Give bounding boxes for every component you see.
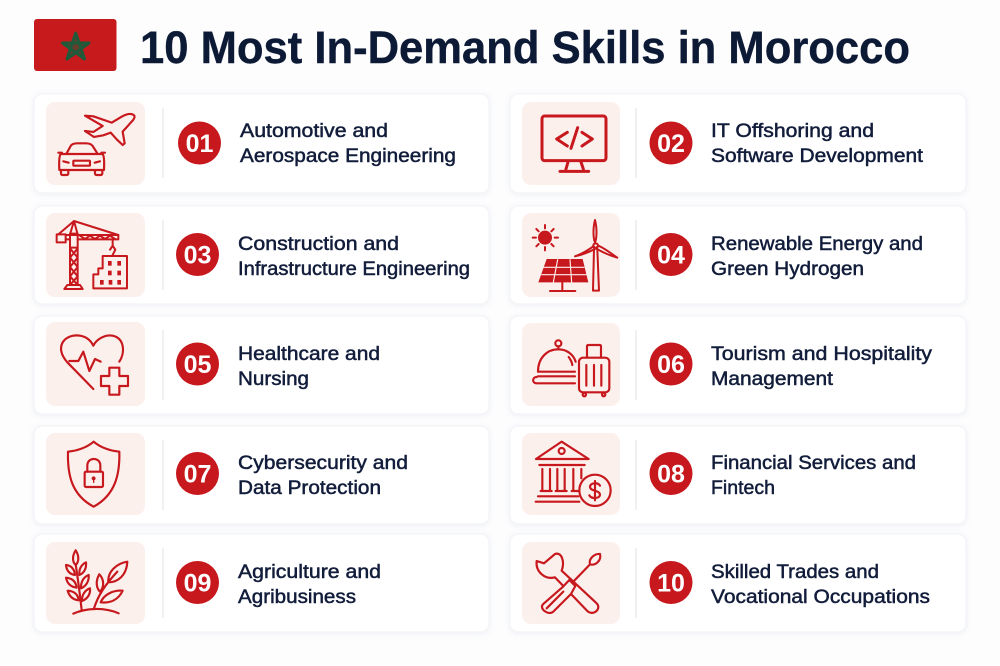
icon: sun, solar panel and wind turbine	[533, 220, 617, 291]
label: Data Protection	[238, 477, 381, 499]
label	[238, 452, 408, 499]
label: Nursing	[238, 368, 309, 390]
icon: shield with padlock	[68, 442, 119, 507]
number badge: 02	[657, 130, 685, 158]
label	[711, 233, 923, 280]
number badge: 06	[657, 351, 685, 379]
panel: 02 IT Offshoring and Software Development	[510, 94, 966, 193]
icon: wrench and screwdriver	[537, 554, 600, 613]
label: Tourism and Hospitality	[711, 343, 932, 365]
label	[238, 343, 380, 390]
number badge: 07	[184, 460, 211, 488]
panel: 09 Agriculture and Agribusiness	[34, 534, 489, 632]
title: 10 Most In-Demand Skills in Morocco	[140, 22, 910, 73]
number badge: 08	[657, 460, 685, 488]
label: Management	[711, 368, 834, 390]
icon: plane and car	[58, 114, 135, 175]
number badge	[650, 342, 692, 386]
label: Renewable Energy and	[711, 233, 923, 255]
label	[711, 343, 932, 390]
label: Green Hydrogen	[711, 258, 864, 280]
label: Automotive and	[240, 120, 388, 142]
number badge: 01	[186, 130, 213, 158]
label: IT Offshoring and	[711, 120, 874, 142]
label	[711, 452, 916, 499]
label	[238, 561, 381, 608]
number badge: 03	[184, 242, 211, 270]
number badge: 04	[657, 242, 685, 270]
label: Aerospace Engineering	[240, 145, 456, 167]
icon: monitor with code	[542, 116, 606, 171]
label: Skilled Trades and	[711, 561, 879, 583]
number badge	[176, 342, 219, 386]
panel: 04 Renewable Energy and Green Hydrogen	[510, 206, 966, 304]
number badge	[178, 122, 221, 164]
icon: Morocco flag	[34, 19, 116, 71]
label: Agribusiness	[238, 586, 356, 608]
label: Agriculture and	[238, 561, 381, 583]
number badge: 10	[657, 570, 685, 598]
icon: crane and building	[57, 221, 127, 289]
icon: service bell and suitcase	[533, 340, 609, 396]
number badge	[176, 452, 219, 495]
label	[238, 233, 470, 280]
panel: 10 Skilled Trades and Vocational Occupations	[510, 534, 966, 632]
number badge	[650, 122, 692, 164]
label	[711, 561, 930, 608]
number badge	[176, 233, 219, 276]
number badge	[650, 561, 692, 604]
icon: heart with pulse and cross	[61, 335, 128, 395]
label: Software Development	[711, 145, 924, 167]
label: Healthcare and	[238, 343, 380, 365]
icon: bank with dollar coin	[536, 442, 611, 506]
panel: 08 Financial Services and Fintech	[510, 426, 966, 524]
label: Fintech	[711, 477, 775, 499]
panel: 05 Healthcare and Nursing	[34, 316, 489, 414]
label	[711, 120, 924, 167]
number badge	[176, 561, 219, 604]
label: Cybersecurity and	[238, 452, 408, 474]
panel: 06 Tourism and Hospitality Management	[510, 316, 966, 414]
panel: 01 Automotive and Aerospace Engineering	[34, 94, 489, 193]
label: Construction and	[238, 233, 399, 255]
number badge	[650, 233, 692, 276]
panel: 07 Cybersecurity and Data Protection	[34, 426, 489, 524]
panel: 03 Construction and Infrastructure Engineering	[34, 206, 489, 304]
label	[240, 120, 456, 167]
label: Infrastructure Engineering	[238, 258, 470, 280]
number badge: 09	[184, 570, 211, 598]
number badge	[650, 452, 692, 495]
label: Vocational Occupations	[711, 586, 930, 608]
icon: wheat and leaves	[66, 550, 127, 614]
label: Financial Services and	[711, 452, 916, 474]
number badge: 05	[184, 351, 211, 379]
